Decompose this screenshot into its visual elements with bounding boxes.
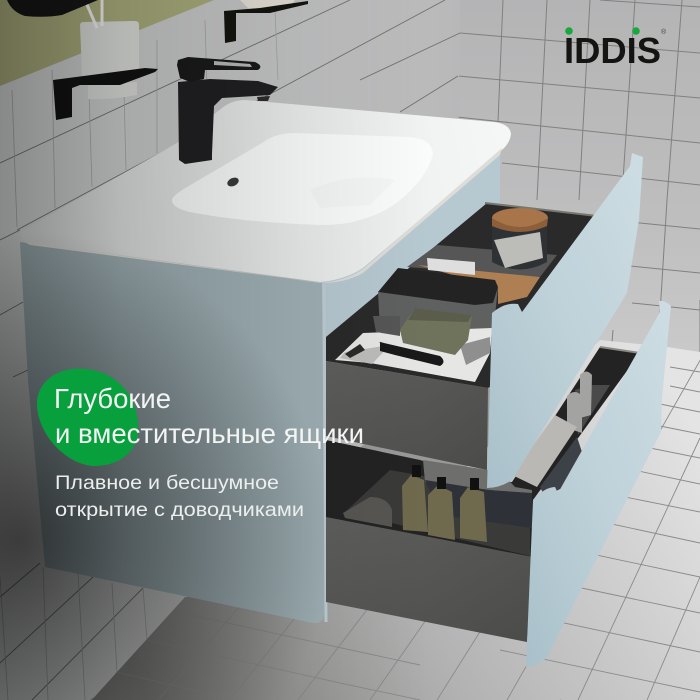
lower drawer interior: [326, 347, 640, 560]
logo green dot right: [632, 27, 640, 35]
wall soap dish: [224, 0, 308, 43]
lower drawer front: [526, 301, 671, 667]
countertop with basin: [20, 100, 511, 283]
vanity cabinet body: [20, 152, 500, 623]
heading: и вместительные ящики: [55, 418, 364, 449]
subheading: [55, 472, 304, 521]
floor tiles: [92, 340, 700, 700]
horizontal lighting overlay: [0, 0, 430, 700]
upper drawer front: [487, 153, 643, 488]
registered mark: ®: [661, 28, 667, 36]
cup in drawer: [343, 497, 392, 527]
wall cup holder: [53, 0, 158, 120]
subheading: открытие с доводчиками: [55, 499, 304, 521]
dark tray: [378, 268, 498, 345]
green blob: [37, 369, 138, 466]
black faucet: [177, 57, 278, 164]
stacked grey towel: [512, 415, 577, 487]
overflow: [226, 176, 240, 188]
wood board: [418, 265, 540, 304]
amber bottles: [402, 475, 487, 542]
upper drawer side panel: [326, 361, 488, 470]
logo green dot left: [565, 27, 573, 35]
jar with wooden lid: [492, 208, 548, 270]
olive wall section: [0, 0, 214, 86]
heading: [54, 383, 364, 449]
razor: [380, 342, 444, 366]
olive glass box: [400, 308, 472, 355]
logo wordmark: IDDIS: [564, 30, 661, 71]
logo: [564, 27, 667, 71]
heading: Глубокие: [54, 383, 171, 414]
lower drawer side panel: [326, 517, 533, 642]
mirror frame corner: [7, 0, 98, 17]
dark folded towel: [425, 480, 532, 528]
white striped towel: [335, 328, 492, 382]
toothbrush stems: [85, 0, 102, 28]
black bracket: [53, 68, 158, 120]
upper drawer interior: [326, 203, 597, 388]
frosted glass: [80, 21, 139, 99]
subheading: Плавное и бесшумное: [55, 472, 279, 494]
bottles at back: [567, 372, 592, 433]
left wall tiles: [0, 0, 460, 700]
right wall tiles: [0, 0, 700, 360]
hair brush: [427, 258, 475, 275]
folded grey cloth: [423, 458, 532, 495]
basin: [172, 133, 433, 225]
